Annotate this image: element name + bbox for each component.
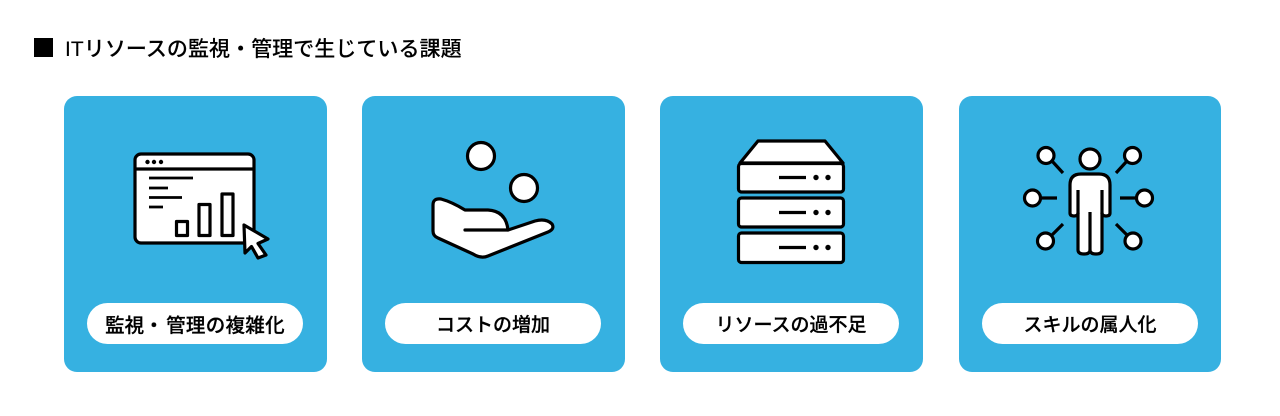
label: skill dependence — [982, 303, 1198, 344]
icon: hand with coins — [433, 142, 553, 257]
label: resource shortage — [683, 303, 899, 344]
panel: skill dependence — [958, 96, 1221, 372]
label: monitoring complexity: 監視・管理の複雑化 — [105, 309, 285, 338]
label: skill dependence: スキルの属人化 — [1023, 310, 1156, 337]
label: cost increase — [385, 303, 601, 344]
icon: server rack — [738, 141, 844, 262]
label: resource shortage: リソースの過不足 — [715, 310, 867, 337]
label: cost increase: コストの増加 — [436, 310, 550, 337]
panel: monitoring complexity — [64, 96, 326, 372]
panel: resource shortage — [660, 96, 922, 372]
icon: browser window with bar chart and cursor — [135, 154, 268, 258]
panel: cost increase — [362, 96, 624, 372]
label: monitoring complexity — [87, 303, 303, 344]
title: ITリソースの監視・管理で生じている課題 — [65, 33, 462, 63]
icon: person with connected skills — [1024, 148, 1152, 254]
